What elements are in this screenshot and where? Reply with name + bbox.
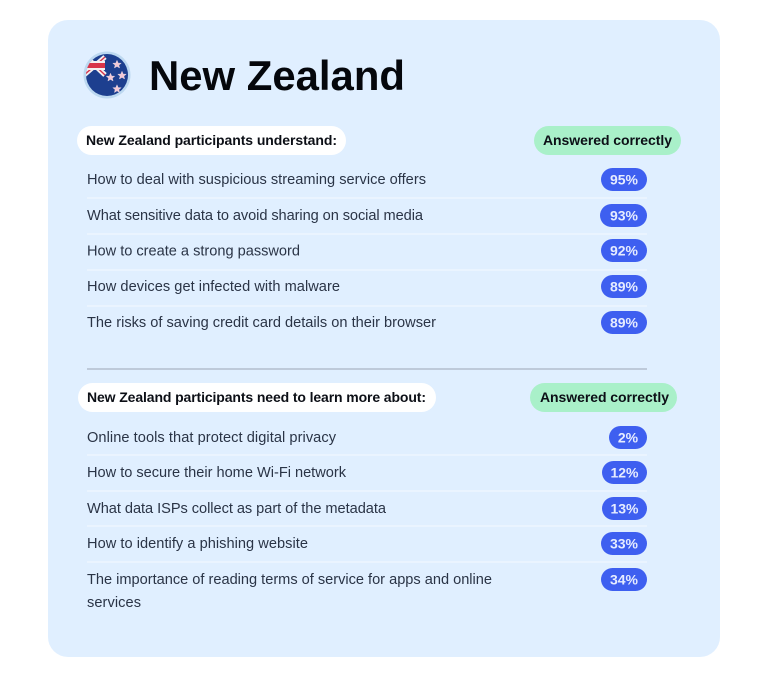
section: participants understand — [77, 126, 681, 334]
row: privacy tools — [87, 426, 647, 449]
row: sensitive data — [87, 204, 647, 227]
row: ISP metadata: 13% — [610, 500, 639, 516]
row: sensitive data: 93% — [610, 208, 639, 224]
row: streaming offers: 95% — [610, 172, 639, 188]
row: privacy tools: 2% — [618, 430, 639, 446]
section: need to learn more — [78, 383, 677, 611]
row: home Wi-Fi: 12% — [610, 464, 639, 480]
row: ISP metadata: What data ISPs collect as part of the metadata — [87, 501, 387, 517]
heading pill: learn more: New Zealand participants need to learn more about: — [87, 389, 426, 405]
row: strong password: How to create a strong password — [87, 244, 300, 260]
heading pill: understand — [77, 126, 346, 155]
row: strong password — [87, 239, 647, 262]
row: strong password: 92% — [610, 242, 639, 258]
title: New Zealand — [149, 52, 405, 99]
row: streaming offers: How to deal with suspicious streaming service offers — [87, 172, 426, 188]
column label: answered correctly: Answered correctly — [540, 389, 669, 405]
row: ISP metadata — [87, 497, 647, 520]
row: terms of service: 34% — [610, 572, 639, 588]
row: home Wi-Fi — [87, 461, 647, 484]
heading pill: understand: New Zealand participants understand: — [86, 132, 337, 148]
column label: answered correctly — [534, 126, 681, 155]
row: phishing website — [87, 532, 647, 555]
row: home Wi-Fi: How to secure their home Wi-Fi network — [87, 465, 347, 481]
row: credit card details — [87, 311, 647, 334]
heading pill: learn more — [78, 383, 436, 412]
row: terms of service: services — [87, 595, 141, 611]
row: malware: How devices get infected with malware — [87, 279, 340, 295]
row: streaming offers — [87, 168, 647, 191]
column label: answered correctly: Answered correctly — [543, 132, 672, 148]
row: terms of service: The importance of reading terms of service for apps and online — [87, 572, 492, 588]
icon: New Zealand flag — [84, 52, 130, 98]
row: privacy tools: Online tools that protect digital privacy — [87, 430, 337, 446]
row: malware — [87, 275, 647, 298]
row: credit card details: The risks of saving credit card details on their browser — [87, 315, 436, 331]
row: credit card details: 89% — [610, 314, 639, 330]
row: phishing website: 33% — [610, 536, 639, 552]
column label: answered correctly — [530, 383, 677, 412]
row: sensitive data: What sensitive data to avoid sharing on social media — [87, 208, 424, 224]
row: phishing website: How to identify a phishing website — [87, 536, 308, 552]
row: terms of service — [87, 568, 647, 611]
row: malware: 89% — [610, 278, 639, 294]
